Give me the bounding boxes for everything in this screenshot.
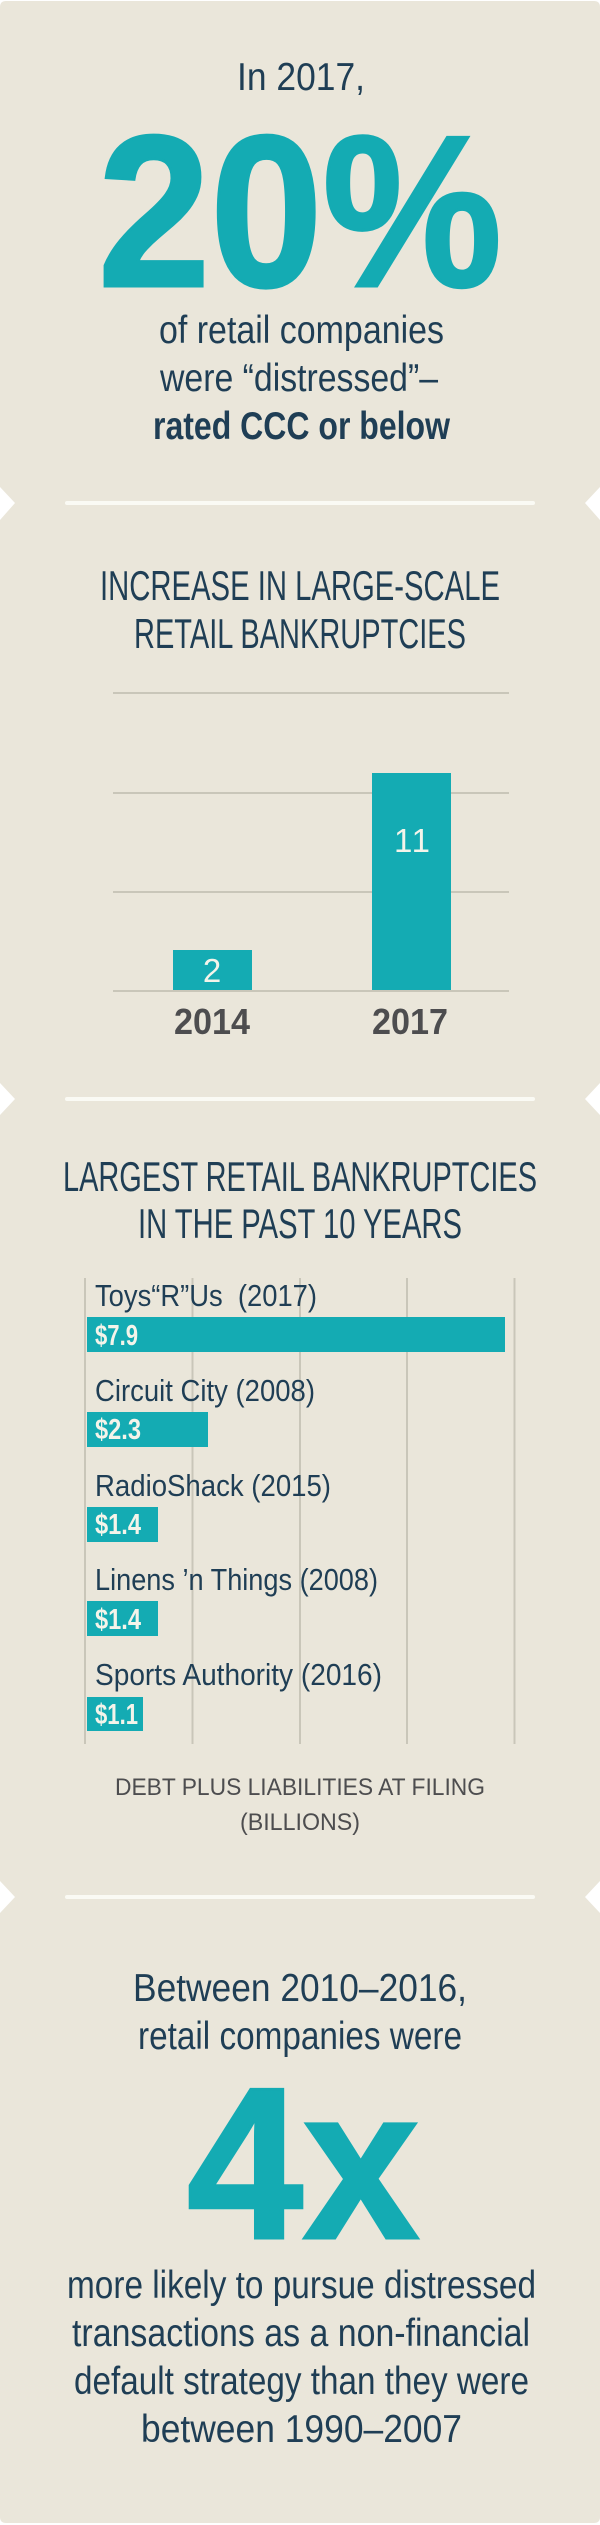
value: 11: 11 — [394, 822, 430, 859]
row: Toys R Us — [87, 1278, 505, 1352]
label: 2017: 2017 — [372, 1001, 448, 1042]
heading: IN THE PAST 10 YEARS — [138, 1200, 462, 1247]
intro text — [133, 1967, 467, 2058]
row: Circuit City — [87, 1373, 315, 1447]
horizontal bar chart — [85, 1278, 514, 1744]
row: Toys R Us: $7.9 — [95, 1320, 138, 1352]
row: Sports Authority: Sports Authority (2016) — [95, 1657, 382, 1692]
row: Linens n Things — [87, 1562, 378, 1636]
label: 2014: 2014 — [174, 1001, 250, 1042]
panel: 4x stat — [67, 1967, 536, 2451]
axis caption: (BILLIONS) — [240, 1809, 360, 1836]
row: Sports Authority — [87, 1657, 382, 1731]
row: Circuit City: Circuit City (2008) — [95, 1373, 315, 1408]
bar: 2014 — [173, 950, 252, 990]
stat description: default strategy than they were — [74, 2360, 529, 2403]
stat description: transactions as a non-financial — [72, 2312, 530, 2355]
stat description — [67, 2264, 536, 2451]
heading — [63, 1153, 537, 1247]
stat description: between 1990–2007 — [141, 2408, 462, 2451]
axis caption — [115, 1774, 485, 1836]
column chart — [113, 693, 509, 1042]
bar: 2017 — [372, 773, 451, 990]
stat description: were “distressed”– — [159, 357, 438, 400]
intro text: retail companies were — [138, 2015, 462, 2058]
panel: 20% stat — [98, 56, 502, 448]
row: RadioShack: RadioShack (2015) — [95, 1468, 331, 1503]
big number 4x: 4x — [187, 2042, 419, 2284]
heading — [100, 562, 500, 657]
axis caption: DEBT PLUS LIABILITIES AT FILING — [115, 1774, 485, 1801]
panel: largest bankruptcies — [63, 1153, 537, 1836]
row: Sports Authority: $1.1 — [95, 1699, 138, 1731]
row: RadioShack: $1.4 — [95, 1509, 141, 1541]
stat description: rated CCC or below — [153, 405, 451, 448]
panel: increase in bankruptcies — [100, 562, 509, 1042]
stat description — [153, 309, 451, 448]
value: 2: 2 — [203, 952, 221, 989]
intro text: Between 2010–2016, — [133, 1967, 467, 2010]
row: Toys R Us: Toys“R”Us (2017) — [95, 1278, 317, 1313]
stat description: more likely to pursue distressed — [67, 2264, 536, 2307]
row: Linens n Things: $1.4 — [95, 1604, 141, 1636]
row: RadioShack — [87, 1468, 331, 1542]
big number 20%: 20% — [98, 90, 502, 332]
row: Linens n Things: Linens ’n Things (2008) — [95, 1562, 378, 1597]
intro text: In 2017, — [237, 56, 365, 99]
row: Circuit City: $2.3 — [95, 1414, 141, 1446]
stat description: of retail companies — [159, 309, 444, 352]
